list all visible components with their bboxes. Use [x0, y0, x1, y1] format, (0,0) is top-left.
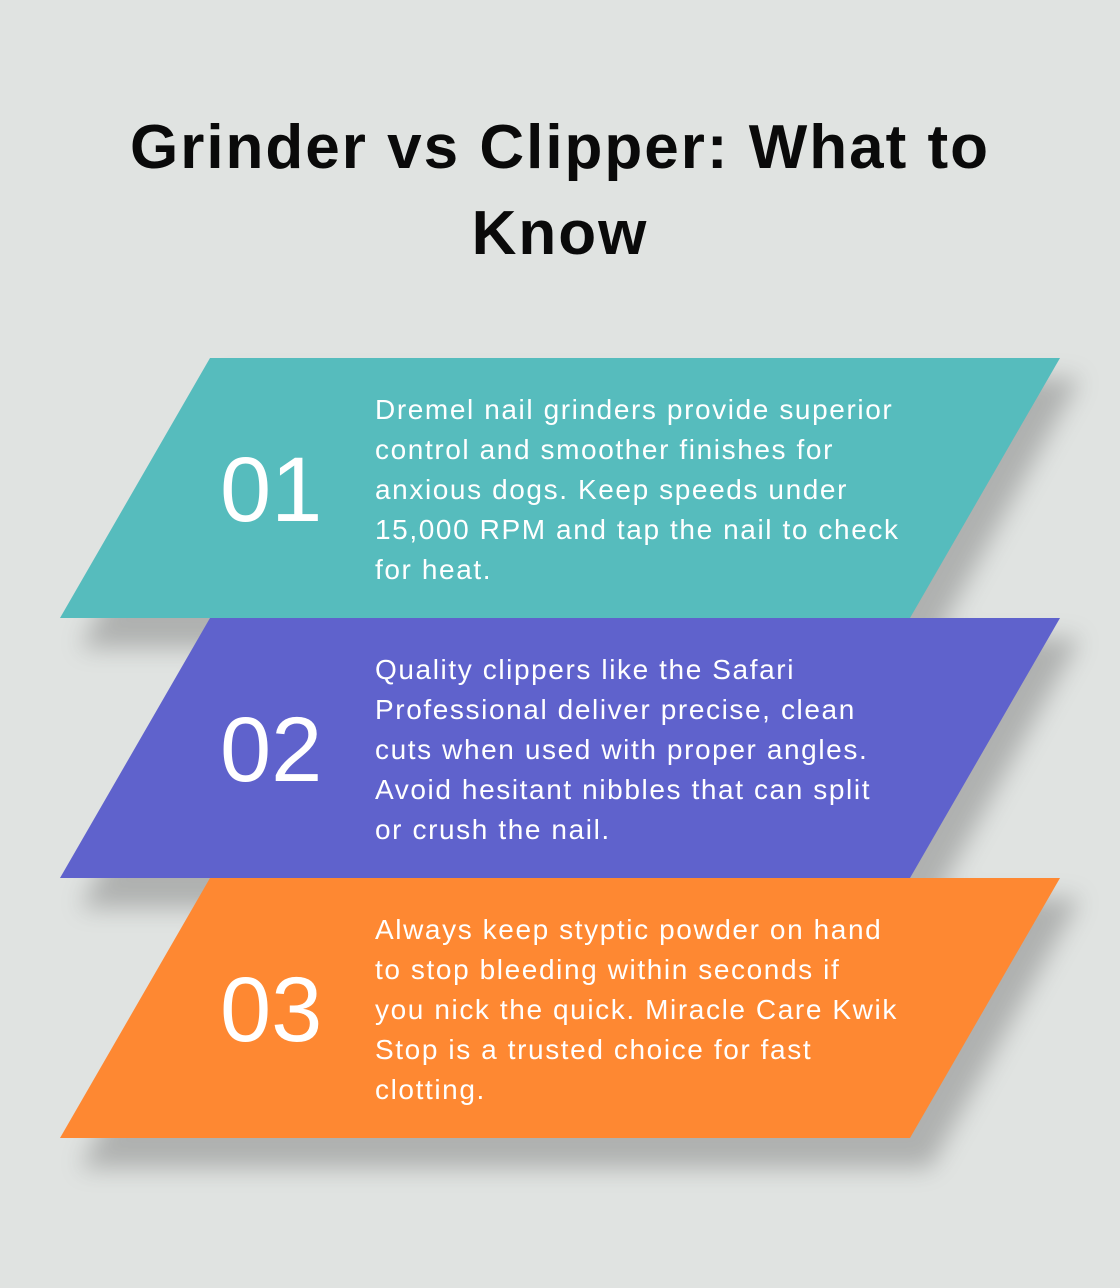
text 1: control and smoother finishes for — [375, 434, 834, 465]
text 2: Professional deliver precise, clean — [375, 694, 856, 725]
text 3: Stop is a trusted choice for fast — [375, 1034, 812, 1065]
text 1: anxious dogs. Keep speeds under — [375, 474, 848, 505]
text 3: to stop bleeding within seconds if — [375, 954, 840, 985]
text 2: cuts when used with proper angles. — [375, 734, 868, 765]
text 2: or crush the nail. — [375, 814, 611, 845]
text 2 — [375, 654, 871, 845]
text 1: 15,000 RPM and tap the nail to check — [375, 514, 900, 545]
text 3: Always keep styptic powder on hand — [375, 914, 882, 945]
text 3 — [375, 914, 898, 1105]
panel 1 shape — [60, 358, 1060, 618]
title: Grinder vs Clipper: What to — [130, 113, 990, 182]
panel 2 shape — [60, 618, 1060, 878]
text 2: Quality clippers like the Safari — [375, 654, 795, 685]
text 1: Dremel nail grinders provide superior — [375, 394, 893, 425]
number 01: 01 — [220, 439, 322, 541]
text 3: clotting. — [375, 1074, 486, 1105]
text 3: you nick the quick. Miracle Care Kwik — [375, 994, 898, 1025]
text 1 — [375, 394, 900, 585]
text 2: Avoid hesitant nibbles that can split — [375, 774, 871, 805]
number 02: 02 — [220, 699, 322, 801]
title: Know — [472, 199, 648, 268]
shadows — [80, 378, 1080, 1168]
text 1: for heat. — [375, 554, 492, 585]
panel 3 shape — [60, 878, 1060, 1138]
number 03: 03 — [220, 959, 322, 1061]
title — [130, 113, 990, 268]
